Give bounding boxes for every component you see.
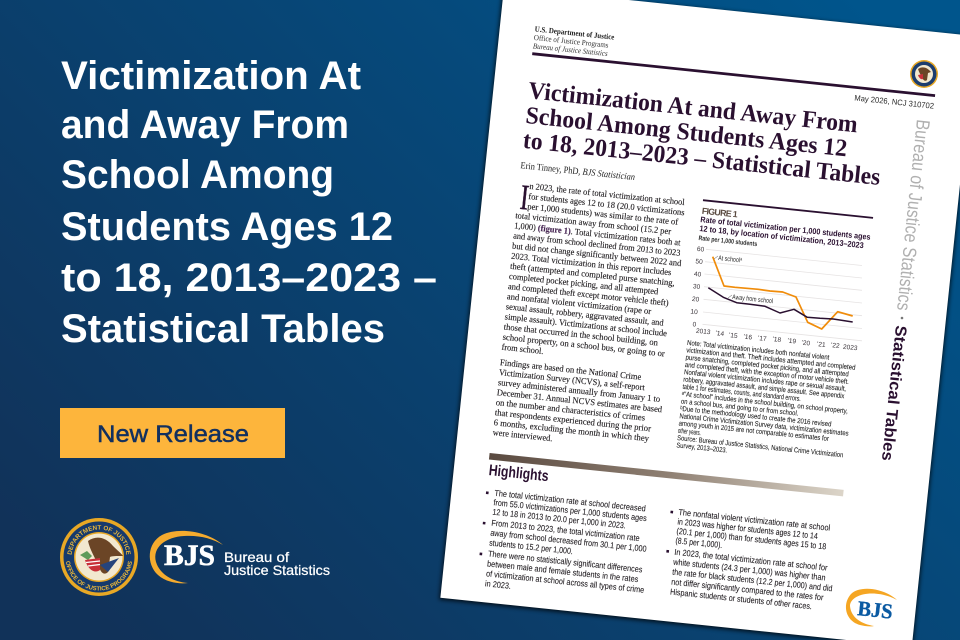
title: to 18, 2013–2023 – xyxy=(61,256,437,300)
vertical series label xyxy=(878,118,933,462)
body text: first paragraph: completed pocket picking, and all attempted xyxy=(509,271,659,296)
body text: second paragraph xyxy=(492,357,666,454)
figure notes: robbery, aggravated assault, and simple assault. See appendix xyxy=(683,376,845,400)
figure notes: ᵇDue to the methodology used to create the 2016 revised xyxy=(680,405,832,428)
agency header xyxy=(533,24,615,59)
body text: first paragraph: sexual assault, robbery, aggravated assault, and xyxy=(505,301,665,328)
label: away from school xyxy=(728,294,774,305)
highlights: left column: from 55.0 victimizations per 1,000 students ages xyxy=(493,497,647,523)
author: Erin Tinney, PhD, BJS Statistician xyxy=(520,161,636,183)
agency header: Office of Justice Programs xyxy=(533,33,609,50)
series: away from school xyxy=(708,288,853,322)
title: School Among xyxy=(61,153,334,197)
highlights: right column: The nonfatal violent victimization rate at school xyxy=(678,507,831,533)
x axis labels: ’22 xyxy=(830,342,840,350)
figure notes: Nonfatal violent victimization includes rape or sexual assault, xyxy=(684,368,847,393)
body text: first paragraph: school property, on a school bus, or going to or xyxy=(502,332,665,359)
figure heading: Rate of total victimization per 1,000 students ages xyxy=(700,215,871,242)
line chart: victimization rates xyxy=(690,246,862,352)
logo letters: BJS xyxy=(164,539,215,572)
x axis labels: ’19 xyxy=(787,338,797,345)
body text: first paragraph: simple assault). Victimizations at school include xyxy=(504,311,668,338)
label: at school: a xyxy=(740,256,743,262)
seal: Office of Justice Programs: OFFICE OF JUSTICE PROGRAMS xyxy=(66,561,132,590)
body text: first paragraph: for students ages 12 to 18 (20.0 victimizations xyxy=(528,191,686,217)
figure notes: among youth in 2015 are not comparable to estimates for xyxy=(678,419,830,443)
body text: second paragraph: Findings are based on the National Crime xyxy=(500,357,642,382)
figure heading xyxy=(698,199,873,260)
highlights: left column: of victimization at school across all types of crime xyxy=(486,568,645,595)
body text: first paragraph: 2023. Total victimization in this report includes xyxy=(511,251,672,277)
wordmark xyxy=(224,549,330,578)
label: at school xyxy=(714,254,743,265)
BJS logo on cover page xyxy=(846,589,897,626)
y axis labels: 50 xyxy=(695,258,703,266)
figure heading: FIGURE 1 xyxy=(701,206,738,219)
logo swoosh xyxy=(150,531,223,583)
highlights: right column: not differ significantly compared to the rates for xyxy=(671,577,824,602)
highlights: left column xyxy=(476,487,653,605)
BJS logo on cover page: BJS xyxy=(856,596,894,624)
x axis labels: 2023 xyxy=(842,344,858,352)
label: away from school: Away from school xyxy=(732,294,774,305)
figure notes: victimization and theft. Theft includes attempted and completed xyxy=(686,346,856,372)
highlights: left column: away from school decreased from 30.1 per 1,000 xyxy=(490,528,647,554)
figure notes: Survey, 2013–2023. xyxy=(676,441,728,455)
wordmark: Bureau of xyxy=(224,549,289,565)
report title: Victimization At and Away From xyxy=(527,77,859,138)
highlights: right column: (20.1 per 1,000) than for students ages 15 to 18 xyxy=(676,526,827,551)
x axis labels: ’14 xyxy=(715,330,725,338)
y axis labels: 30 xyxy=(692,283,701,291)
title: and Away From xyxy=(61,103,349,147)
highlights: right column xyxy=(662,506,839,613)
highlights: right column: (8.5 per 1,000). xyxy=(675,535,723,550)
report cover page xyxy=(439,0,960,640)
figure notes: other years. xyxy=(678,427,701,437)
highlights: left column: between male and female students in the rates xyxy=(487,558,639,584)
highlights band xyxy=(489,453,844,496)
highlights: left column: The total victimization rate at school decreased xyxy=(494,488,646,513)
x axis labels: ’17 xyxy=(757,335,767,343)
figure heading: 12 to 18, by location of victimization, 2013–2023 xyxy=(699,224,864,250)
title: Victimization At xyxy=(61,54,361,98)
body text: first paragraph: and nonfatal violent victimization (rape or xyxy=(506,291,652,316)
highlights: right column: white students (24.3 per 1,000) was higher than xyxy=(672,557,826,583)
x axis labels: ’16 xyxy=(743,334,753,341)
highlights: right column: In 2023, the total victimization rate at school for xyxy=(674,547,828,573)
y axis labels: 10 xyxy=(690,309,698,316)
figure heading: Rate per 1,000 students xyxy=(698,235,758,248)
body text: second paragraph: that respondents experienced during the prior xyxy=(494,407,652,433)
x axis labels: ’20 xyxy=(801,340,811,347)
body text: second paragraph: on the number and characteristics of crimes xyxy=(495,397,646,423)
body text: first paragraph: from school. xyxy=(501,342,544,356)
report title xyxy=(522,77,887,191)
seal on cover page xyxy=(910,60,938,88)
x axis labels: ’18 xyxy=(772,336,782,344)
highlights: right column: Hispanic students or students of other races. xyxy=(670,587,812,611)
title: Students Ages 12 xyxy=(61,205,393,249)
x axis labels: 2013 xyxy=(695,328,711,336)
body text: first paragraph: those that occurred in the school building, on xyxy=(503,322,659,348)
x axis labels: ’21 xyxy=(816,341,826,349)
vertical series label: Bureau of Justice Statistics xyxy=(892,118,933,312)
figure notes: on a school bus, and going to or from school. xyxy=(681,398,799,418)
agency header: Bureau of Justice Statistics xyxy=(533,41,608,58)
highlights: right column: in 2023 was higher for students ages 12 to 14 xyxy=(677,516,819,541)
body text: second paragraph: Victimization Survey (NCVS), a self-report xyxy=(499,367,646,392)
report title: to 18, 2013–2023 – Statistical Tables xyxy=(522,127,882,191)
body text: first paragraph: and away from school declined from 2013 to 2023 xyxy=(513,230,681,258)
BJS logo with wordmark xyxy=(150,531,330,583)
figure notes: purse snatching, completed pocket picking, and all attempted xyxy=(685,354,849,379)
title xyxy=(61,54,437,351)
body text: first paragraph: I xyxy=(518,177,531,218)
highlights: left column: There were no statistically significant differences xyxy=(488,548,643,574)
body text: first paragraph: per 1,000 students) was similar to the rate of xyxy=(527,201,679,227)
x axis labels xyxy=(695,328,858,352)
report title: School Among Students Ages 12 xyxy=(524,102,848,162)
y axis labels: 0 xyxy=(692,321,697,329)
seal: Office of Justice Programs xyxy=(60,518,138,596)
highlights heading: Highlights xyxy=(488,462,549,485)
figure notes: Note: Total victimization includes both nonfatal violent xyxy=(687,339,830,362)
figure notes: National Crime Victimization Survey data, victimization estimates xyxy=(679,412,849,438)
highlights: left column: in 2023. xyxy=(485,578,511,591)
new release button xyxy=(60,408,285,458)
highlights: left column: students to 15.2 per 1,000. xyxy=(489,537,573,556)
agency header: U.S. Department of Justice xyxy=(534,24,615,42)
body text: second paragraph: were interviewed. xyxy=(492,427,553,443)
body text: first paragraph: theft (attempted and completed purse snatching, xyxy=(510,261,675,288)
y axis labels: 20 xyxy=(691,296,700,304)
figure notes: ᵃ"At school" includes in the school building, on school property, xyxy=(681,390,848,415)
body text: first paragraph: but did not change significantly between 2022 and xyxy=(512,241,682,268)
figure notes xyxy=(676,339,857,467)
label: at school: At school xyxy=(718,255,746,265)
vertical series label: Statistical Tables xyxy=(878,325,909,462)
y axis labels: 60 xyxy=(696,246,705,254)
x axis labels: ’15 xyxy=(728,332,738,340)
seal: Office of Justice Programs: DEPARTMENT OF JUSTICE xyxy=(67,525,131,555)
title: Statistical Tables xyxy=(61,307,385,351)
body text: first paragraph: 1,000) (figure 1). Total victimization rates both at xyxy=(514,220,681,248)
y axis labels: 40 xyxy=(693,271,702,279)
highlights: left column: From 2013 to 2023, the total victimization rate xyxy=(491,518,640,543)
series: at school xyxy=(713,257,853,329)
figure notes: table 1 for estimates, counts, and standard errors. xyxy=(682,383,801,403)
body text: first paragraph: and completed theft except motor vehicle theft) xyxy=(508,281,669,308)
figure notes: and completed theft, with the exception of motor vehicle theft. xyxy=(684,361,849,386)
y axis labels xyxy=(690,246,705,329)
new release button: New Release xyxy=(97,421,249,448)
body text: first paragraph: total victimization away from school (15.2 per xyxy=(515,210,672,236)
highlights: left column: 12 to 18 in 2013 to 20.0 per 1,000 in 2023. xyxy=(492,507,626,531)
body text: second paragraph: December 31. Annual NCVS estimates are based xyxy=(496,387,663,414)
body text: second paragraph: 6 months, excluding the month in which they xyxy=(493,417,650,443)
highlights: right column: the rate for black students (12.2 per 1,000) and did xyxy=(672,567,833,593)
wordmark: Justice Statistics xyxy=(224,562,330,578)
body text: first paragraph xyxy=(501,177,689,369)
body text: first paragraph: n 2023, the rate of total victimization at school xyxy=(529,181,686,207)
body text: second paragraph: survey administered annually from January 1 to xyxy=(497,377,661,404)
figure notes: Source: Bureau of Justice Statistics, National Crime Victimization xyxy=(677,434,844,459)
date and report number: May 2026, NCJ 310702 xyxy=(854,93,935,111)
